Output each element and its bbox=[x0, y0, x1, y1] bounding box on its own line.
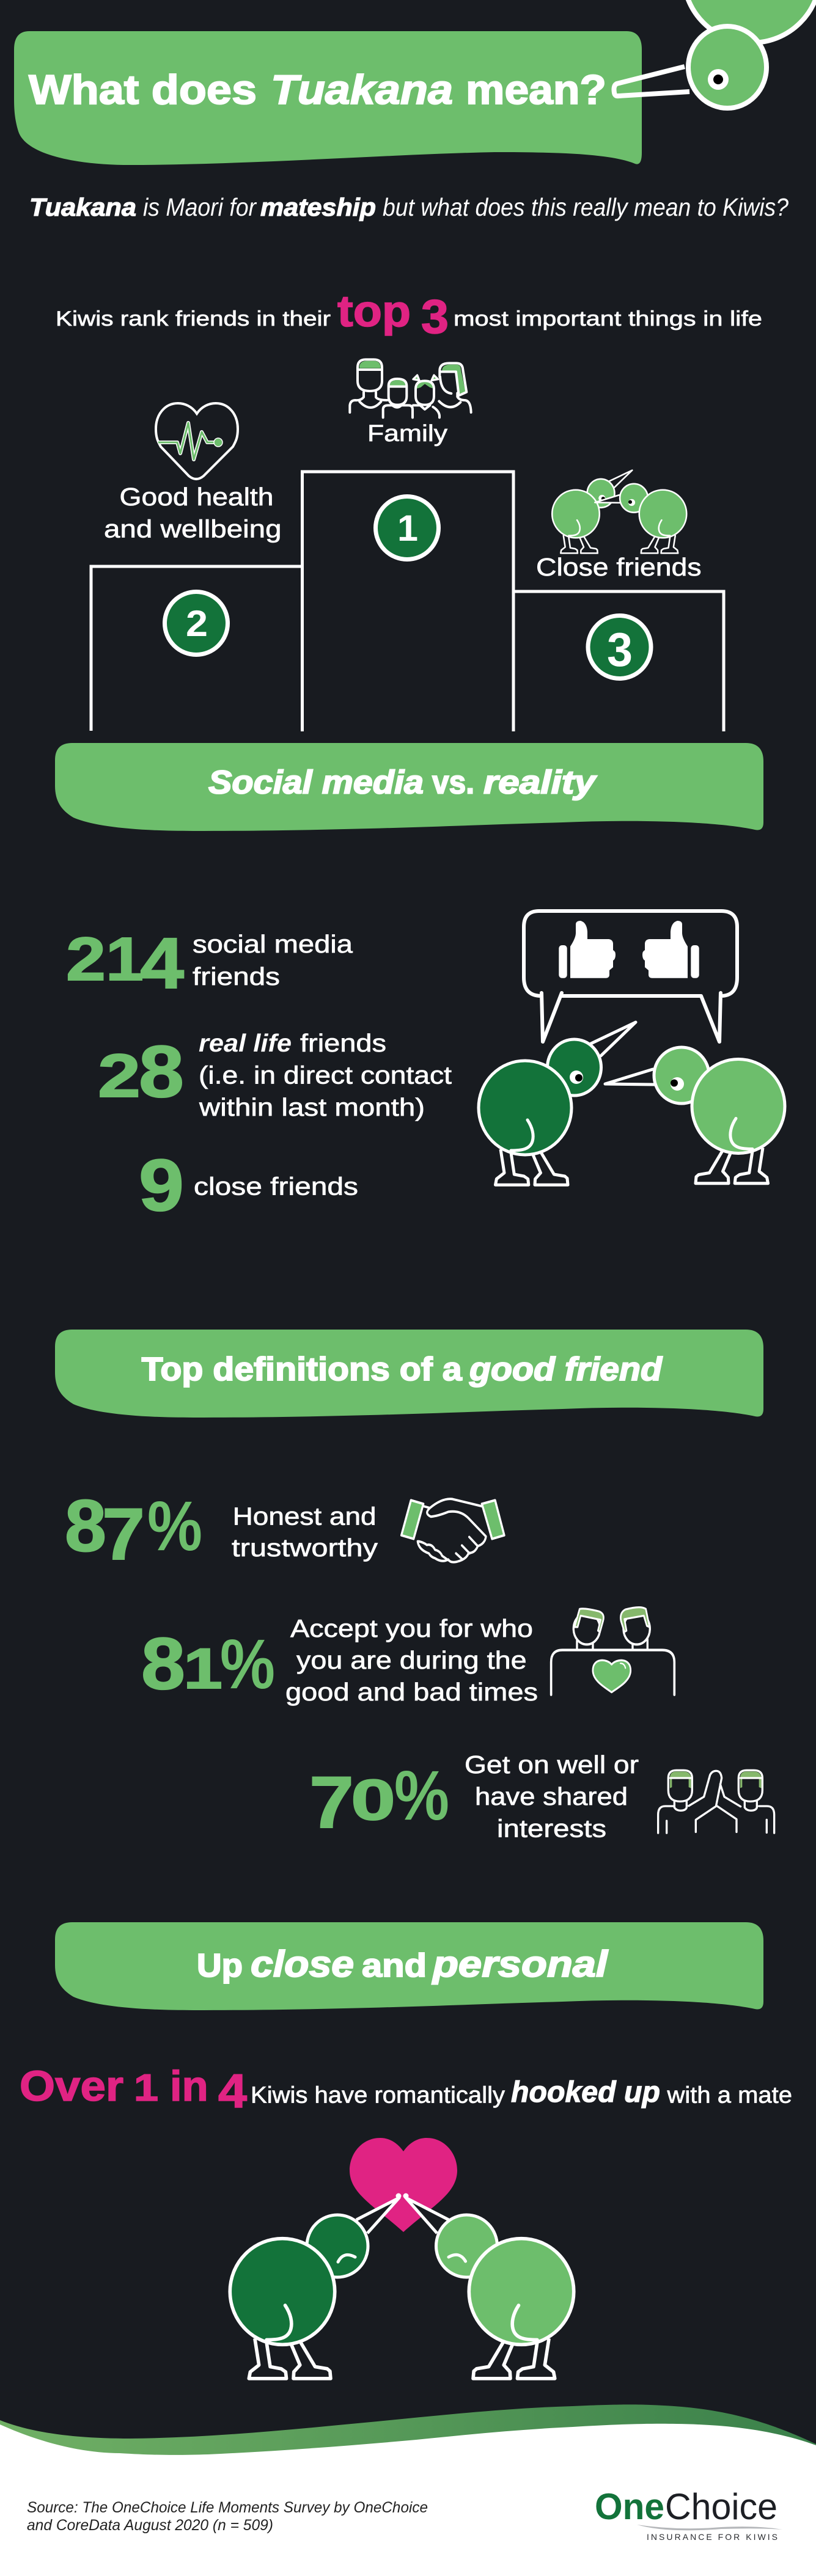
title text: Tuakana bbox=[271, 67, 453, 113]
label: good health and wellbeing: Good health bbox=[120, 483, 274, 511]
title text: mean? bbox=[466, 67, 606, 113]
rank 3 badge bbox=[588, 616, 651, 678]
heading text: vs. bbox=[432, 764, 474, 800]
rank 2 badge: 2 bbox=[186, 603, 208, 644]
label: good health and wellbeing: and wellbeing bbox=[104, 514, 281, 543]
stat: 81% accept you: 1 bbox=[183, 1636, 222, 1700]
section banner: social media vs reality bbox=[55, 743, 763, 831]
source note: Source: The OneChoice Life Moments Survey by OneChoice bbox=[27, 2499, 428, 2516]
stat: over 1 in 4: hooked up bbox=[511, 2076, 660, 2109]
rank 2 badge bbox=[165, 591, 227, 655]
podium bbox=[91, 472, 724, 731]
kiwi: light green bbox=[605, 1047, 785, 1184]
rank 1 badge: 1 bbox=[397, 508, 418, 549]
icon: heart with pulse bbox=[156, 403, 238, 479]
stat: 214 social media friends: 2 bbox=[66, 925, 106, 993]
heading text: and bbox=[362, 1947, 427, 1984]
title text bbox=[29, 67, 606, 113]
stat: 28 real life friends: 2 bbox=[98, 1042, 141, 1110]
stat: 70% get on well bbox=[309, 1751, 639, 1843]
stat: 214 social media friends: 1 bbox=[106, 925, 144, 993]
subtitle: Tuakana bbox=[29, 193, 136, 221]
icon: high five bbox=[658, 1770, 774, 1833]
heading text: good friend bbox=[469, 1351, 663, 1388]
section banner: top definitions bbox=[55, 1330, 763, 1418]
rank 1 badge bbox=[375, 496, 439, 560]
stat: 70% get on well: 0 bbox=[351, 1768, 395, 1832]
stat: 87% honest and trustworthy: 8 bbox=[65, 1485, 106, 1567]
heading text: reality bbox=[483, 764, 597, 800]
heading text: Social media bbox=[208, 764, 424, 800]
stat: 214 social media friends: social media bbox=[193, 930, 353, 958]
top 3 heading: top bbox=[337, 287, 411, 336]
heading text: Top definitions of a bbox=[142, 1351, 463, 1388]
stat: over 1 in 4: Kiwis have romantically bbox=[251, 2083, 505, 2109]
heading text bbox=[142, 1351, 663, 1388]
footer wave bbox=[0, 2404, 816, 2576]
top 3 heading bbox=[56, 287, 762, 343]
subtitle: is Maori for bbox=[143, 193, 257, 221]
speech bubble with thumbs up bbox=[524, 911, 737, 1042]
stat: 81% accept you: good and bad times bbox=[285, 1678, 538, 1706]
stat: 214 social media friends: 4 bbox=[140, 923, 184, 1004]
title text: What does bbox=[29, 67, 257, 113]
stat: 70% get on well: Get on well or bbox=[465, 1751, 639, 1779]
icon: two small kiwis bbox=[552, 470, 686, 553]
icon: handshake bbox=[402, 1499, 504, 1562]
logo: OneChoice: INSURANCE FOR KIWIS bbox=[647, 2532, 777, 2542]
rank 3 badge: 3 bbox=[607, 623, 633, 676]
source note bbox=[27, 2499, 428, 2534]
stat: over 1 in 4: 1 bbox=[134, 2067, 158, 2109]
stat: over 1 in 4: 4 bbox=[218, 2064, 247, 2118]
stat: 28 real life friends: friends bbox=[300, 1029, 386, 1057]
top 3 heading: most important things in life bbox=[454, 307, 762, 331]
top 3 heading: Kiwis rank friends in their bbox=[56, 307, 331, 331]
stat: over 1 in 4: in bbox=[170, 2062, 208, 2110]
source note: and CoreData August 2020 (n = 509) bbox=[27, 2517, 273, 2534]
stat: 28 real life friends: 8 bbox=[139, 1031, 184, 1113]
stat: 28 real life friends: (i.e. in direct contact bbox=[199, 1061, 452, 1089]
logo: OneChoice: Choice bbox=[665, 2486, 777, 2527]
stat: 70% get on well: % bbox=[394, 1757, 449, 1835]
stat: 28 real life friends: real life bbox=[199, 1029, 292, 1057]
stat: 87% honest and trustworthy: 7 bbox=[102, 1493, 145, 1575]
title banner bbox=[14, 31, 642, 165]
stat: 9 close friends: close friends bbox=[194, 1172, 358, 1200]
stat: over 1 in 4: Over bbox=[20, 2062, 123, 2110]
stat: 87% honest and trustworthy: % bbox=[147, 1487, 202, 1565]
stat: 81% accept you: 8 bbox=[141, 1623, 185, 1705]
top 3 heading: 3 bbox=[421, 290, 449, 343]
stat: over 1 in 4 bbox=[20, 2062, 792, 2118]
subtitle bbox=[29, 193, 788, 221]
icon: thumb left bbox=[559, 921, 616, 978]
stat: 87% honest and trustworthy: trustworthy bbox=[232, 1534, 378, 1562]
stat: 87% honest and trustworthy bbox=[65, 1485, 378, 1575]
subtitle: but what does this really mean to Kiwis? bbox=[383, 193, 788, 221]
stat: 28 real life friends bbox=[98, 1029, 452, 1121]
heading text bbox=[208, 764, 597, 800]
stat: 9 close friends bbox=[139, 1144, 358, 1226]
label: good health and wellbeing bbox=[104, 483, 281, 543]
heading text: close bbox=[251, 1944, 354, 1985]
section banner: up close and personal bbox=[55, 1922, 763, 2010]
stat: 70% get on well: 7 bbox=[309, 1762, 354, 1843]
heading text: personal bbox=[432, 1944, 609, 1985]
icon: family bbox=[350, 359, 471, 417]
stat: 70% get on well: interests bbox=[497, 1815, 606, 1843]
stat: 214 social media friends bbox=[66, 923, 353, 1004]
logo: OneChoice bbox=[595, 2486, 782, 2542]
stat: over 1 in 4: with a mate bbox=[666, 2083, 792, 2109]
heading text bbox=[197, 1944, 609, 1985]
subtitle: mateship bbox=[260, 193, 376, 221]
icon: two friends and a heart bbox=[551, 1608, 674, 1695]
stat: 87% honest and trustworthy: Honest and bbox=[233, 1502, 377, 1531]
kiwi: dark green bbox=[479, 1022, 636, 1185]
heading text: Up bbox=[197, 1947, 243, 1984]
kiwi: dark green kissing bbox=[230, 2194, 401, 2379]
icon: kiwi peeking in top right corner bbox=[614, 0, 816, 108]
logo: OneChoice: One bbox=[595, 2486, 664, 2527]
stat: 70% get on well: have shared bbox=[475, 1782, 628, 1810]
stat: 81% accept you: % bbox=[220, 1625, 275, 1703]
stat: 28 real life friends: within last month) bbox=[199, 1093, 425, 1121]
stat: 81% accept you: Accept you for who bbox=[290, 1614, 533, 1642]
stat: 81% accept you: you are during the bbox=[296, 1646, 527, 1674]
label: close friends: Close friends bbox=[536, 553, 702, 581]
stat: 81% accept you bbox=[141, 1614, 538, 1706]
stat: 214 social media friends: friends bbox=[193, 962, 280, 990]
icon: pink heart bbox=[350, 2138, 457, 2232]
icon: thumb right bbox=[642, 921, 699, 978]
kiwi: light green kissing bbox=[403, 2194, 574, 2379]
stat: 9 close friends: 9 bbox=[139, 1144, 184, 1226]
label: family: Family bbox=[367, 421, 447, 447]
